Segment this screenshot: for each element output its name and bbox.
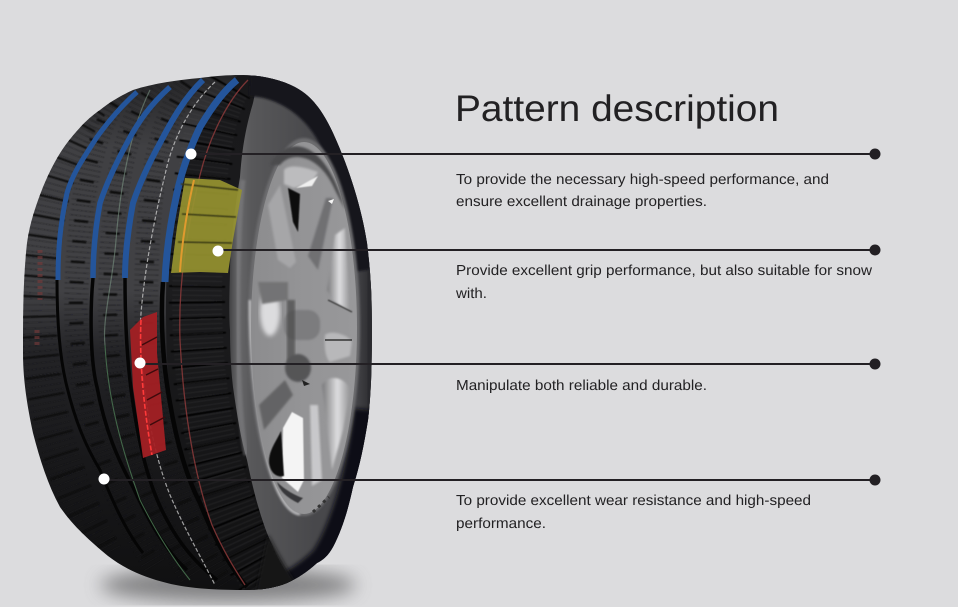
centre rib sipes — [146, 84, 228, 586]
right window lobe — [327, 228, 350, 312]
description 2 — [455, 263, 873, 302]
red zone dashed stripe — [141, 320, 152, 455]
right hub stud — [325, 333, 352, 362]
anchor dot 2 — [212, 246, 224, 256]
description 1: ensure excellent drainage properties. — [456, 194, 707, 210]
callout 1: high-speed and drainage — [186, 148, 880, 210]
hub bolt — [284, 310, 320, 340]
yellow zone orange stripe — [180, 180, 194, 272]
leader line 1 — [191, 153, 875, 155]
lower bright window — [282, 412, 304, 492]
shoulder sipes — [38, 84, 272, 590]
rim lip — [250, 300, 300, 514]
tire body — [23, 75, 372, 590]
shoulder rib base — [166, 70, 300, 592]
red zone sipes — [142, 337, 165, 425]
red sidewall lettering marks — [37, 250, 40, 345]
leader line 4 — [104, 479, 875, 481]
blue grooves — [58, 92, 137, 280]
left bright lobe — [260, 288, 280, 336]
description 3: Manipulate both reliable and durable. — [456, 378, 707, 394]
red highlight zone — [130, 312, 166, 458]
lower rim shadow — [277, 482, 303, 503]
sidewall ring highlight — [238, 180, 246, 455]
tire illustration — [23, 75, 372, 590]
lower hub bolt — [285, 354, 311, 382]
callout 3: handling — [134, 358, 880, 394]
top hub cap highlight — [284, 166, 318, 188]
sidewall — [229, 76, 372, 578]
white dashed line — [140, 82, 215, 585]
callout 4: wear resistance — [98, 474, 880, 532]
ground shadow — [100, 568, 356, 602]
outer rib sipes — [38, 105, 105, 555]
description 4: To provide excellent wear resistance and high-speed — [456, 493, 811, 509]
title: Pattern description — [455, 88, 779, 129]
upper left spoke — [268, 185, 296, 268]
anchor dot 4 — [98, 474, 110, 484]
valve holes — [313, 497, 329, 512]
anchor dot 1 — [186, 148, 196, 160]
right dark band — [368, 270, 371, 420]
upper window — [288, 188, 300, 232]
tread pattern — [37, 70, 300, 592]
lower right spoke — [322, 378, 350, 470]
callout 2: grip — [212, 244, 880, 302]
yellow highlight zone — [171, 178, 242, 273]
anchor dot 3 — [134, 358, 146, 368]
upper rim barrel — [270, 146, 345, 210]
end dot 2 — [870, 244, 880, 256]
lower black window — [269, 431, 284, 476]
fine rib texture — [146, 84, 228, 586]
end dot 4 — [870, 474, 880, 486]
upper outer dark arc — [250, 84, 367, 270]
lower black grooves — [57, 280, 143, 553]
green line — [105, 345, 190, 580]
description 4: performance. — [456, 516, 546, 532]
leader line 2 — [218, 249, 875, 251]
red centre line on shoulder — [180, 80, 248, 585]
lower left dark spoke — [259, 380, 293, 430]
lower sidewall dark fade — [258, 535, 293, 590]
description 4 — [456, 493, 811, 532]
description 1 — [456, 172, 829, 210]
wheel rim — [248, 138, 360, 516]
description 2: Provide excellent grip performance, but also suitable for snow — [456, 263, 873, 279]
lower outer dark arc — [262, 410, 369, 596]
description 2: with. — [455, 286, 487, 302]
leader line 3 — [140, 363, 875, 365]
end dot 1 — [870, 148, 880, 160]
infographic canvas — [23, 75, 880, 606]
end dot 3 — [870, 358, 880, 370]
yellow zone sipes — [178, 184, 238, 243]
description 1: To provide the necessary high-speed performance, and — [456, 172, 829, 188]
upper right spoke — [308, 198, 333, 270]
